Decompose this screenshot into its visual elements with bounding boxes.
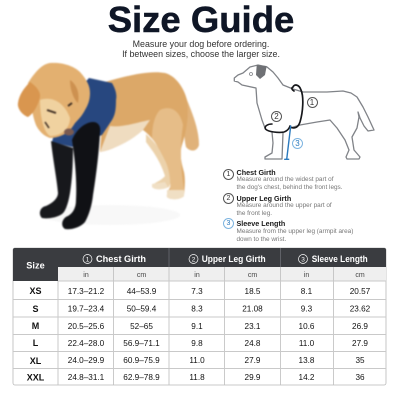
table values: 9.3 xyxy=(301,304,313,314)
tail xyxy=(184,100,199,151)
table sub header background xyxy=(58,267,386,281)
subtitle text xyxy=(122,38,280,59)
table values: 14.2 xyxy=(299,373,315,382)
size column: L xyxy=(33,338,39,348)
legend 2 text: the front leg. xyxy=(236,210,272,217)
size column: M xyxy=(32,321,39,331)
table header background xyxy=(13,248,386,281)
size column: XL xyxy=(30,356,42,366)
table values: 36 xyxy=(355,373,365,382)
legend 3 text: Measure from the upper leg (armpit area) xyxy=(236,228,353,234)
table values: 18.5 xyxy=(245,287,261,296)
table values: 60.9–75.9 xyxy=(123,356,160,365)
sleeve length arrow xyxy=(285,126,291,159)
legend 3 text: down to the wrist. xyxy=(236,236,286,242)
table values: 52–65 xyxy=(130,322,153,331)
table values: 21.08 xyxy=(242,304,263,314)
dog head xyxy=(28,63,90,138)
table values: 23.1 xyxy=(245,322,261,331)
table values: 8.3 xyxy=(191,304,203,314)
table values: 8.1 xyxy=(301,287,313,296)
table values: 19.7–23.4 xyxy=(68,304,105,314)
legend 1 icon xyxy=(223,169,234,180)
subtitle text: If between sizes, choose the larger size. xyxy=(122,49,280,59)
marker 3 on diagram xyxy=(292,138,303,149)
upper leg girth loop xyxy=(265,124,290,132)
table values: 22.4–28.0 xyxy=(68,339,105,348)
table values: 29.9 xyxy=(245,373,261,382)
size table: 3 xyxy=(301,256,305,264)
table values: 20.57 xyxy=(350,287,371,296)
legend 1 text: Measure around the widest part of xyxy=(236,176,333,183)
table values: 56.9–71.1 xyxy=(123,339,160,348)
column headers: Upper Leg Girth xyxy=(202,254,266,264)
marker 3 on diagram: 3 xyxy=(295,139,300,148)
table values: 50–59.4 xyxy=(127,304,157,314)
subtitle text: Measure your dog before ordering. xyxy=(133,38,269,48)
chest girth loop xyxy=(290,85,303,128)
eye xyxy=(250,72,252,76)
unit labels xyxy=(83,272,365,279)
table values xyxy=(68,287,371,382)
table values: 11.0 xyxy=(299,339,315,348)
legend 1 text: the dog's chest, behind the front legs. xyxy=(236,184,343,191)
legend 2 heading: Upper Leg Girth xyxy=(236,194,291,202)
column headers: Chest Girth xyxy=(96,254,146,264)
table values: 26.9 xyxy=(352,322,368,331)
size column xyxy=(27,286,45,382)
legend 1 text xyxy=(236,176,343,191)
dog body xyxy=(100,72,188,199)
table values: 24.0–29.9 xyxy=(68,356,105,365)
table values: 7.3 xyxy=(191,287,203,296)
unit labels: cm xyxy=(137,272,146,279)
front sleeve xyxy=(62,122,100,229)
marker 2 on diagram: 2 xyxy=(274,112,279,121)
legend 3 heading: Sleeve Length xyxy=(236,219,285,228)
unit labels: cm xyxy=(248,272,257,279)
table values: 24.8–31.1 xyxy=(68,373,105,382)
far hind leg xyxy=(146,134,172,189)
ear xyxy=(256,65,267,79)
table values: 11.8 xyxy=(189,373,205,382)
title: Size Guide xyxy=(108,0,294,40)
paws xyxy=(152,182,184,199)
muzzle xyxy=(40,99,70,136)
thigh highlight xyxy=(152,108,184,190)
table values: 35 xyxy=(355,356,365,365)
size column: S xyxy=(32,304,39,314)
column headers: Sleeve Length xyxy=(312,254,368,264)
marker 1 on diagram: 1 xyxy=(310,98,314,106)
table values: 23.62 xyxy=(350,304,371,314)
legend 2 text xyxy=(236,202,332,217)
unit labels: in xyxy=(304,272,309,279)
column headers xyxy=(26,254,368,270)
unit labels: in xyxy=(194,272,200,279)
legend 3 icon xyxy=(223,218,234,229)
legend 3 icon: 3 xyxy=(227,220,230,227)
legend 1 heading: Chest Girth xyxy=(236,168,276,176)
size table: 2 xyxy=(192,256,196,264)
right ear xyxy=(70,80,79,103)
legend 3 text xyxy=(236,228,353,242)
size column: XXL xyxy=(27,372,45,382)
table values: 24.8 xyxy=(245,339,261,348)
table values: 44–53.9 xyxy=(127,287,157,296)
table values: 9.1 xyxy=(191,322,203,331)
column headers: Size xyxy=(26,260,45,270)
size column: XS xyxy=(29,286,42,296)
belly highlight xyxy=(100,120,150,152)
dog outline xyxy=(234,65,374,159)
unit labels: in xyxy=(83,272,89,279)
table values: 17.3–21.2 xyxy=(68,287,105,296)
legend 1 icon: 1 xyxy=(227,171,230,178)
rear sleeve xyxy=(40,141,73,218)
table values: 20.5–25.6 xyxy=(68,322,105,331)
size table: 1 xyxy=(86,256,90,264)
table values: 9.8 xyxy=(191,339,203,348)
legend: measurement instructions xyxy=(223,168,353,242)
left ear xyxy=(18,82,40,117)
table values: 10.6 xyxy=(299,322,315,331)
legend 2 text: Measure around the upper part of xyxy=(236,202,332,209)
legend 2 icon: 2 xyxy=(227,195,230,202)
table values: 27.9 xyxy=(352,339,368,348)
legend 2 icon xyxy=(223,193,234,204)
table values: 13.8 xyxy=(299,356,315,365)
table values: 11.0 xyxy=(189,356,205,365)
table values: 27.9 xyxy=(245,356,261,365)
table values: 62.9–78.9 xyxy=(123,373,160,382)
harness vest xyxy=(52,78,116,147)
marker 2 on diagram xyxy=(271,111,282,122)
header circled numbers xyxy=(83,254,308,264)
unit labels: cm xyxy=(355,272,365,279)
marker 1 on diagram xyxy=(306,96,318,108)
nose xyxy=(64,128,74,136)
